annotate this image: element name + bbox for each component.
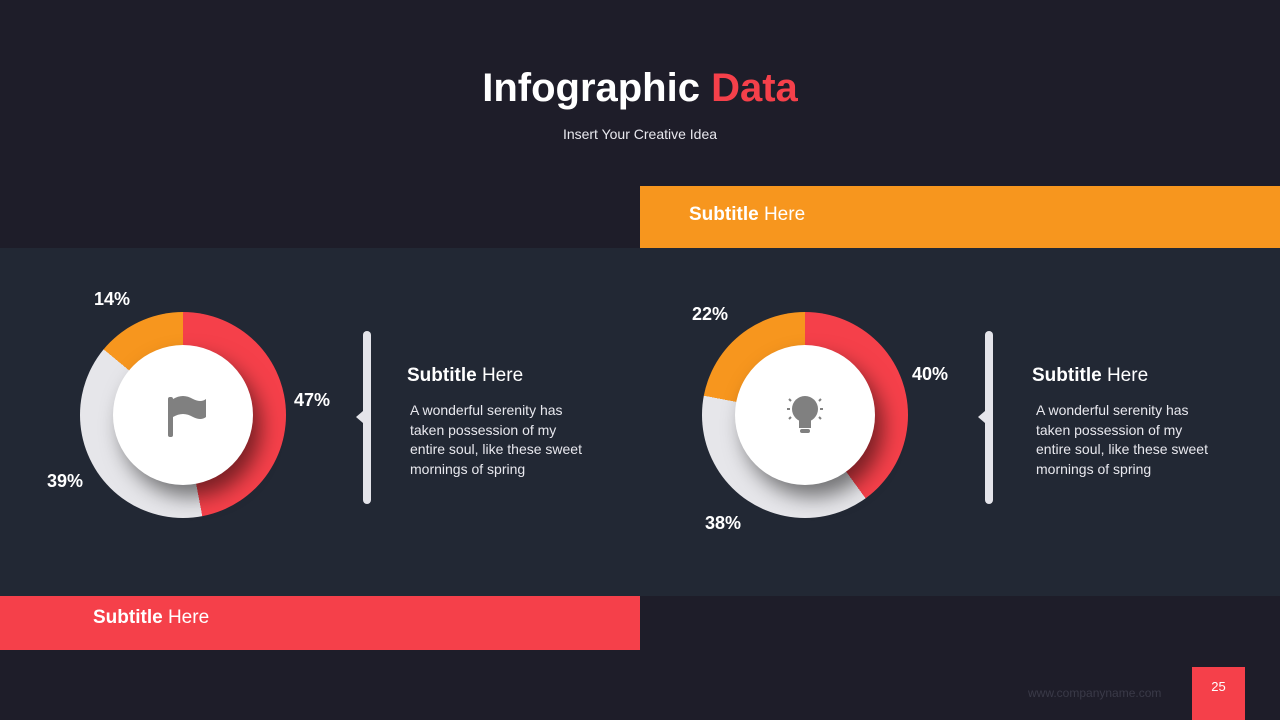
- page number: [1192, 667, 1245, 720]
- orange subtitle bar: Subtitle Here: [689, 204, 805, 225]
- text block right: [1032, 365, 1208, 477]
- red subtitle bar: [0, 596, 640, 650]
- page number: 25: [1211, 679, 1226, 694]
- label 22%: 22%: [692, 304, 728, 324]
- label 47%: 47%: [294, 390, 330, 410]
- icon: flag: [113, 345, 253, 485]
- orange subtitle bar: [640, 186, 1280, 248]
- text block left: A wonderful serenity has taken possession of my entire soul, like these sweet mornings of spring: [410, 402, 582, 476]
- text block right: Subtitle Here: [1032, 365, 1148, 386]
- title: Infographic Data: [482, 66, 798, 110]
- donut chart left: [80, 312, 286, 518]
- text block left: [407, 365, 582, 477]
- content band: [0, 248, 1280, 596]
- donut chart right: [702, 312, 908, 518]
- label 39%: 39%: [47, 471, 83, 491]
- divider left: [363, 331, 371, 504]
- icon: lightbulb: [735, 345, 875, 485]
- label 38%: 38%: [705, 513, 741, 533]
- text block right: A wonderful serenity has taken possession of my entire soul, like these sweet mornings of spring: [1036, 402, 1208, 476]
- red subtitle bar: Subtitle Here: [93, 607, 209, 628]
- label 14%: 14%: [94, 289, 130, 309]
- footer url: www.companyname.com: [1028, 686, 1161, 700]
- tagline: Insert Your Creative Idea: [563, 126, 717, 142]
- text block left: Subtitle Here: [407, 365, 523, 386]
- label 40%: 40%: [912, 364, 948, 384]
- divider right: [985, 331, 993, 504]
